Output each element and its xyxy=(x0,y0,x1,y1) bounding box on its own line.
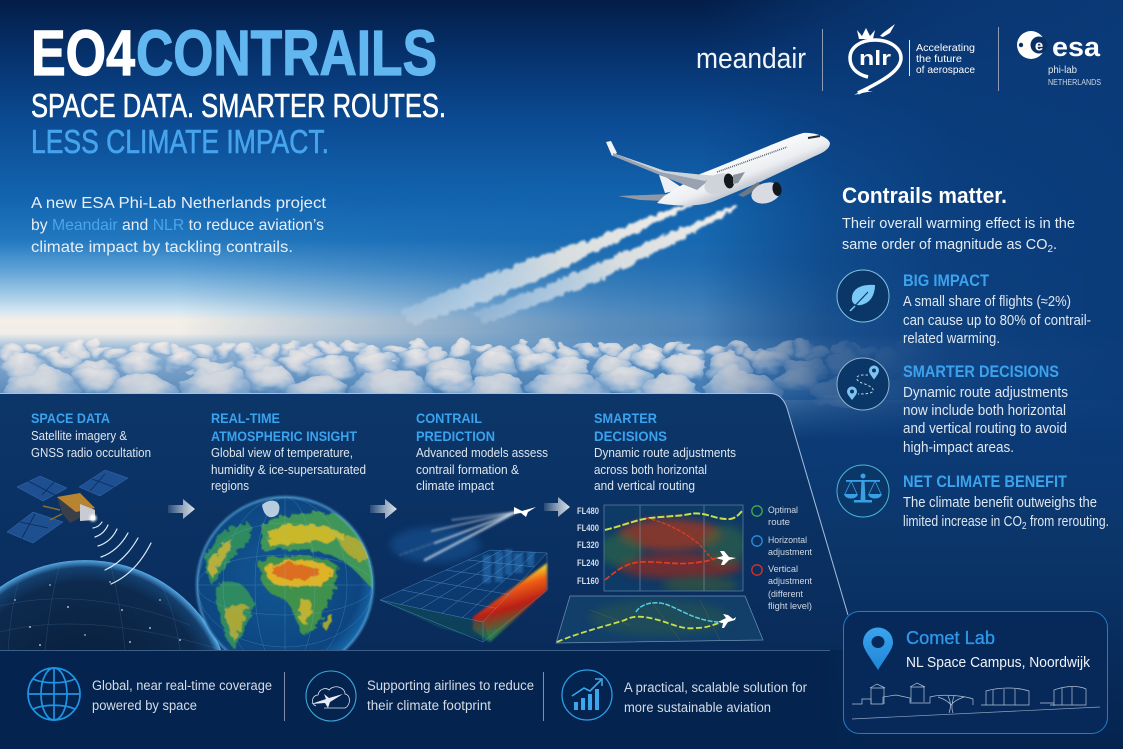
logo: NLR: Accelerating xyxy=(916,42,975,54)
text: contrail prediction: climate impact xyxy=(416,479,495,493)
icon: location pin xyxy=(863,628,893,670)
text: practical solution: A practical, scalable solution for xyxy=(624,680,807,695)
text: warming effect: same order of magnitude as CO xyxy=(842,237,1048,253)
text: smarter decisions: Dynamic route adjustments xyxy=(594,446,736,460)
text: contrail prediction: contrail formation & xyxy=(416,463,520,477)
text: global coverage: Global, near real-time coverage xyxy=(92,678,272,693)
block: smarter decisions: SMARTER DECISIONS xyxy=(903,362,1059,381)
text: practical solution xyxy=(624,680,807,715)
card: Comet Lab location xyxy=(844,612,1108,734)
text: contrail prediction: CONTRAIL xyxy=(416,410,482,426)
text: atmospheric insight: humidity & ice-supersaturated xyxy=(211,463,366,477)
block: smarter decisions: high-impact areas. xyxy=(903,440,1014,456)
text: Comet Lab: Comet Lab xyxy=(906,628,995,648)
icon: globe xyxy=(28,668,80,720)
text: warming effect xyxy=(842,216,1075,255)
text: contrail prediction: PREDICTION xyxy=(416,428,495,444)
text: smarter decisions: and vertical routing xyxy=(594,479,695,493)
text: contrail prediction: Advanced models assess xyxy=(416,446,548,460)
chart: flight level axis labels: FL320 xyxy=(577,540,599,551)
icon: route xyxy=(837,358,889,410)
logo: ESA phi-lab: NETHERLANDS xyxy=(1048,78,1101,87)
chart: flight level axis labels xyxy=(577,506,599,587)
block: net climate benefit xyxy=(903,472,1109,532)
text: warming effect: Their overall warming effect is in the xyxy=(842,216,1075,232)
legend: route types: route xyxy=(768,517,790,528)
block: net climate benefit: from rerouting. xyxy=(1027,514,1109,530)
legend: route types: flight level) xyxy=(768,601,812,612)
block: smarter decisions xyxy=(903,362,1068,456)
logo: meandair: meandair xyxy=(696,43,806,75)
text: contrail prediction xyxy=(416,410,548,493)
step: atmospheric insight xyxy=(197,410,374,673)
chart: route map xyxy=(556,596,763,643)
legend: route types: (different xyxy=(768,589,803,600)
icon: leaf xyxy=(837,270,889,322)
arrow: step 3 to 4 xyxy=(544,497,570,517)
block: net climate benefit: 2 xyxy=(1022,521,1027,532)
text: atmospheric insight: regions xyxy=(211,479,249,493)
illustration: campus buildings xyxy=(852,683,1100,719)
icon: signal waves xyxy=(93,522,151,584)
text: smarter decisions: DECISIONS xyxy=(594,428,667,444)
icon: cloud and airplane xyxy=(306,671,356,721)
title: CONTRAILS xyxy=(136,17,437,89)
logo: ESA phi-lab: esa xyxy=(1052,32,1101,62)
chart: flight level axis labels: FL160 xyxy=(577,576,599,587)
step: space data xyxy=(0,410,222,651)
block: smarter decisions: Dynamic route adjustments xyxy=(903,385,1068,401)
chart: flight level routes xyxy=(598,505,747,593)
text: atmospheric insight: Global view of temperature, xyxy=(211,446,353,460)
chart: flight level axis labels: FL480 xyxy=(577,506,599,517)
step: smarter decisions xyxy=(556,410,812,643)
subtitle xyxy=(31,87,446,160)
block: net climate benefit: limited increase in CO xyxy=(903,514,1045,530)
logo: NLR: of aerospace xyxy=(916,64,975,76)
logo: ESA phi-lab: e xyxy=(1035,38,1043,54)
panel: process steps xyxy=(0,393,848,650)
legend: route types: adjustment xyxy=(768,576,812,587)
text: warming effect: . xyxy=(1053,237,1057,253)
logo: ESA phi-lab xyxy=(1017,31,1101,87)
block: big impact: can cause up to 80% of contrail- xyxy=(903,313,1091,329)
text: smarter decisions: across both horizontal xyxy=(594,463,707,477)
icon: balance scale xyxy=(837,465,889,517)
block: smarter decisions: now include both horizontal xyxy=(903,403,1066,419)
illustration: dark earth with network xyxy=(0,560,222,651)
block: net climate benefit: The climate benefit outweighs the xyxy=(903,495,1097,511)
icon: satellite xyxy=(7,470,128,543)
block: big impact xyxy=(903,271,1091,347)
text: global coverage xyxy=(92,678,272,713)
block: big impact: BIG IMPACT xyxy=(903,271,990,290)
title: EO4 xyxy=(31,17,135,89)
footer band xyxy=(0,650,1123,749)
title xyxy=(31,17,437,89)
text: supporting airlines xyxy=(367,678,534,713)
text: smarter decisions xyxy=(594,410,736,493)
text: space data: SPACE DATA xyxy=(31,410,110,426)
text: space data: Satellite imagery & xyxy=(31,429,128,443)
intro text: climate impact by tackling contrails. xyxy=(31,239,293,256)
block: big impact: related warming. xyxy=(903,331,1000,347)
text: atmospheric insight xyxy=(211,410,366,493)
text: atmospheric insight: ATMOSPHERIC INSIGHT xyxy=(211,428,357,444)
legend: route types: Vertical xyxy=(768,564,798,575)
text: supporting airlines: Supporting airlines to reduce xyxy=(367,678,534,693)
legend: route types: Horizontal xyxy=(768,535,807,546)
logo: NLR: nlr xyxy=(859,48,891,70)
subtitle: LESS CLIMATE IMPACT. xyxy=(31,123,329,160)
icon: growth chart xyxy=(562,670,612,720)
airplane xyxy=(606,133,830,207)
text: supporting airlines: their climate footprint xyxy=(367,698,491,713)
contrails xyxy=(400,201,736,325)
legend: route types xyxy=(752,505,812,612)
subtitle: SPACE DATA. SMARTER ROUTES. xyxy=(31,87,446,124)
text: warming effect: 2 xyxy=(1047,244,1053,255)
intro text xyxy=(31,195,327,256)
text: space data: GNSS radio occultation xyxy=(31,446,151,460)
panel: contrails matter xyxy=(837,183,1109,532)
logo: ESA phi-lab: phi-lab xyxy=(1048,65,1077,76)
illustration: climate globe xyxy=(197,497,374,673)
legend: route types: adjustment xyxy=(768,547,812,558)
text: space data xyxy=(31,410,151,460)
heading: contrails matter: Contrails matter. xyxy=(842,183,1007,208)
block: net climate benefit: NET CLIMATE BENEFIT xyxy=(903,472,1068,491)
arrow: step 2 to 3 xyxy=(370,499,397,519)
intro text: by Meandair and NLR to reduce aviation’s xyxy=(31,217,324,234)
text: address: NL Space Campus, Noordwijk xyxy=(906,655,1091,671)
logo: NLR: the future xyxy=(916,53,962,65)
step: contrail prediction xyxy=(380,410,548,642)
block: big impact: A small share of flights (≈2%) xyxy=(903,294,1071,310)
logo: meandair xyxy=(696,29,823,91)
text: atmospheric insight: REAL-TIME xyxy=(211,410,280,426)
intro text: A new ESA Phi-Lab Netherlands project xyxy=(31,195,327,212)
text: practical solution: more sustainable aviation xyxy=(624,700,771,715)
logo: NLR xyxy=(850,24,999,95)
text: global coverage: powered by space xyxy=(92,698,197,713)
chart: flight level axis labels: FL400 xyxy=(577,523,599,534)
text: smarter decisions: SMARTER xyxy=(594,410,657,426)
block: smarter decisions: and vertical routing to avoid xyxy=(903,421,1067,437)
chart: 3D contrail model xyxy=(380,507,547,642)
legend: route types: Optimal xyxy=(768,505,798,516)
arrow: step 1 to 2 xyxy=(168,499,195,519)
chart: flight level axis labels: FL240 xyxy=(577,558,599,569)
